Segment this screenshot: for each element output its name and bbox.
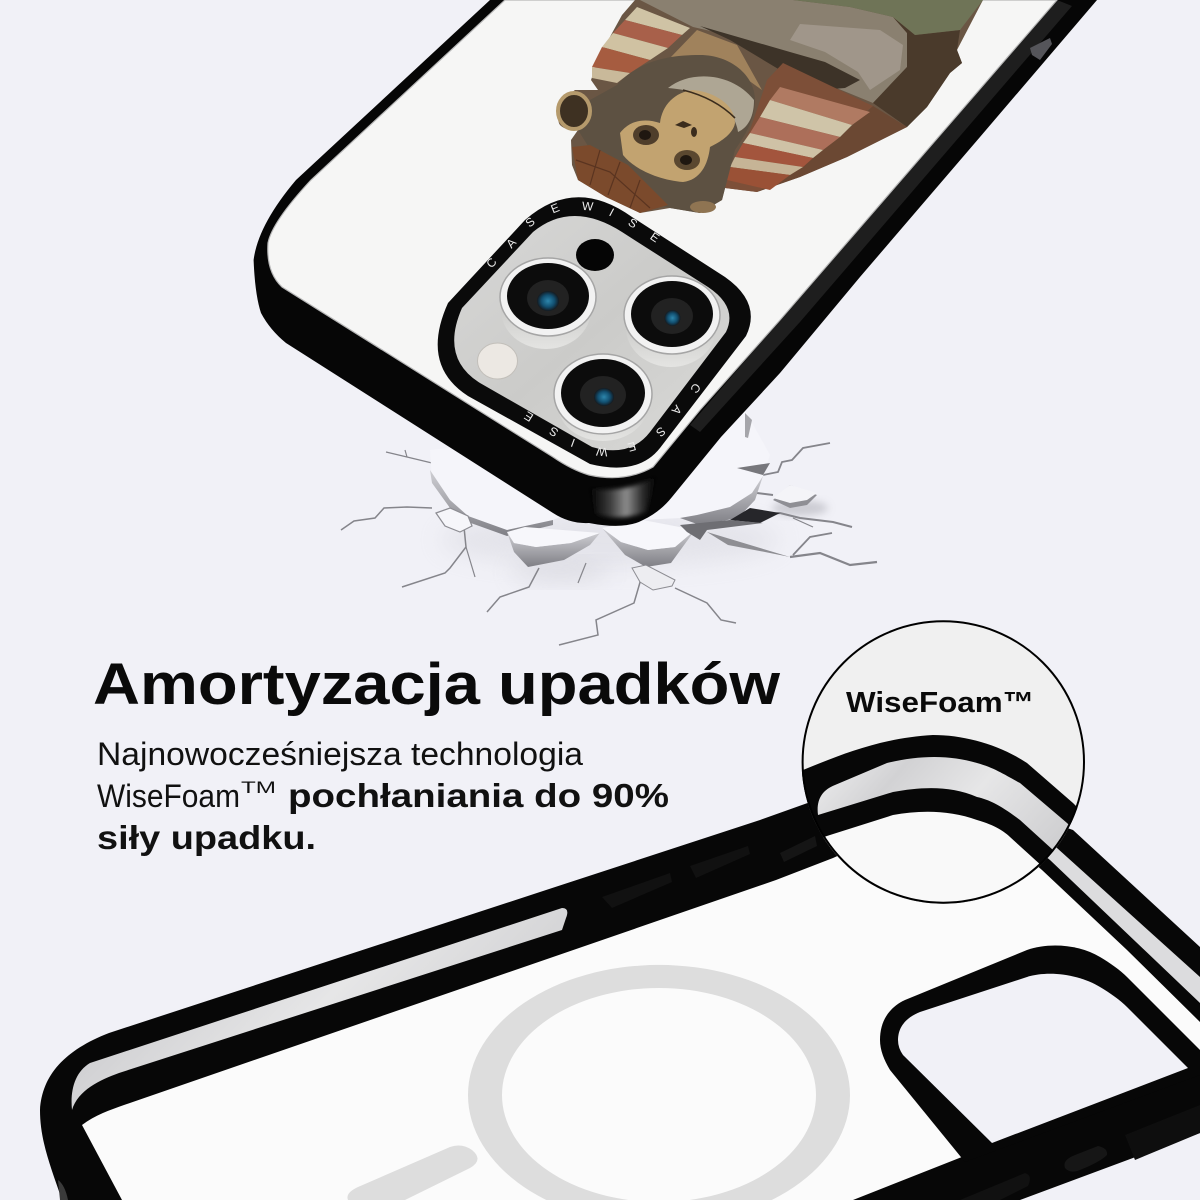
description text: pochłaniania do 90% <box>288 777 669 814</box>
right sleeve stripes <box>725 63 873 192</box>
collar <box>670 30 762 90</box>
flash <box>478 343 518 379</box>
ears <box>558 93 716 213</box>
case: foam window left <box>72 908 567 1110</box>
description text: Najnowocześniejsza technologia <box>97 736 583 772</box>
lens 3 <box>554 354 652 441</box>
crack lines <box>341 443 877 645</box>
brand text top: CASEWISE <box>483 199 662 271</box>
circle outline <box>803 621 1084 903</box>
left sleeve stripes <box>592 7 690 83</box>
camera plate <box>454 216 729 450</box>
case: clear back panel <box>82 800 1200 1200</box>
camera surround <box>438 197 751 468</box>
crown hair <box>668 76 754 132</box>
green shirt <box>793 0 983 35</box>
monkey illustration <box>558 0 983 213</box>
illustration: cracked ground <box>341 410 877 645</box>
magnified content <box>802 735 1078 904</box>
face <box>620 90 735 182</box>
head <box>578 55 755 213</box>
small stone <box>632 565 675 590</box>
fur <box>640 0 907 103</box>
magnified foam window <box>818 757 1070 851</box>
magnified clear panel <box>823 812 1040 904</box>
nose and brow <box>675 90 735 137</box>
magnified frame <box>802 735 1078 904</box>
lens 1 <box>500 258 596 349</box>
phone: back panel <box>268 0 1057 478</box>
slab A <box>507 527 600 567</box>
description text: siły upadku. <box>97 819 316 856</box>
left slab <box>430 440 600 530</box>
right slab <box>640 410 790 557</box>
cutout opening <box>898 974 1188 1143</box>
case: black frame (bottom) <box>40 770 1200 1200</box>
phone: bumper highlight <box>590 476 656 518</box>
magnifier callout <box>802 620 1085 904</box>
right stone <box>773 485 817 508</box>
case: camera cutout <box>880 946 1200 1162</box>
case: foam window right <box>1000 800 1200 1003</box>
brand text bottom: CASEWISE <box>522 380 704 459</box>
description text: WiseFoam <box>97 778 240 814</box>
eyes <box>633 125 700 170</box>
slab B <box>602 520 695 567</box>
case: side buttons <box>602 836 817 908</box>
description text <box>97 736 669 856</box>
phone: button notch <box>1030 38 1052 60</box>
left pebble <box>436 508 472 532</box>
phone: outer bumper (top) <box>254 0 1097 526</box>
ring <box>438 197 751 468</box>
case: MagSafe alignment pill <box>347 1146 478 1200</box>
WiseFoam label: WiseFoam™ <box>846 687 1034 719</box>
fur shadow <box>700 26 860 90</box>
phone: right bumper inner strip <box>690 0 1072 432</box>
cutout frame <box>880 946 1200 1162</box>
title: Amortyzacja upadków <box>93 652 781 717</box>
brown belly band <box>757 106 907 192</box>
silhouette <box>558 0 983 213</box>
description text: TM <box>241 778 276 797</box>
fur highlight <box>790 24 903 90</box>
LiDAR <box>576 239 614 271</box>
dark lower fur <box>873 17 962 127</box>
lens 2 <box>624 276 720 367</box>
hat <box>572 145 668 213</box>
case: lower edge ports <box>58 1105 1200 1200</box>
case: MagSafe ring <box>468 965 850 1200</box>
